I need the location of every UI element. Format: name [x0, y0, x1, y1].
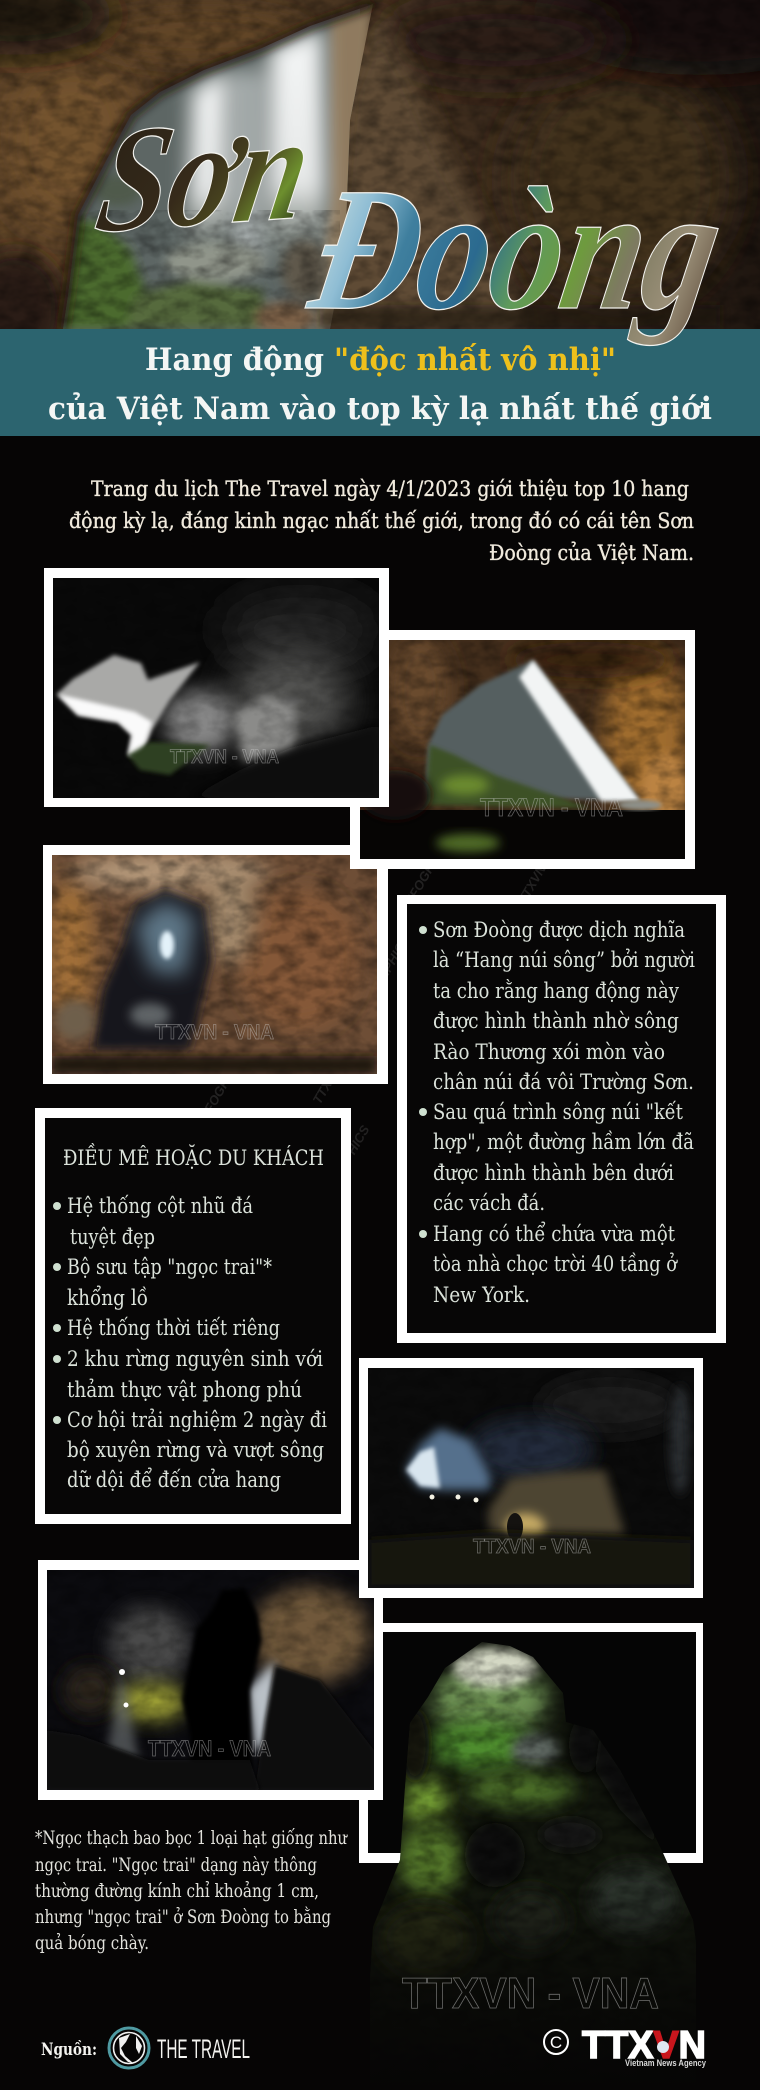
heading band — [0, 329, 760, 436]
photo frame 2: light beam into cave: TTXVN - VNA — [480, 794, 623, 822]
intro text: Trang du lịch The Travel ngày 4/1/2023 giới thiệu top 10 hang — [91, 477, 689, 501]
list item 1 — [53, 1194, 253, 1249]
background watermarks: TTXVN — [515, 862, 549, 906]
source name: THE TRAVEL — [157, 2034, 250, 2064]
background watermarks: INFOGRAPHICS — [350, 932, 413, 1026]
light beams — [186, 28, 328, 270]
list item 5: Cơ hội trải nghiệm 2 ngày đi — [67, 1408, 327, 1432]
list item 5: bộ xuyên rừng và vượt sông — [67, 1438, 324, 1462]
source label: Nguồn: — [41, 2040, 97, 2060]
list item 1: Hệ thống cột nhũ đá — [67, 1194, 253, 1218]
icon: globe in logo — [657, 2041, 669, 2053]
photo frame 1: foggy cave mouth: TTXVN - VNA — [170, 747, 279, 768]
list item 3: Hệ thống thời tiết riêng — [67, 1316, 280, 1340]
background watermarks: INFOGRAPHICS — [400, 817, 463, 912]
title: Sơn: Sơn — [86, 82, 323, 265]
bullet 2: Sau quá trình sông núi "kết — [433, 1100, 683, 1124]
hero photo: cave opening — [0, 0, 760, 329]
photo frame 6: green cave — [359, 1623, 703, 2009]
text box: what attracts visitors — [35, 1108, 351, 1524]
TTXVN wordmark: TTXVN — [582, 2024, 706, 2067]
footnote: thường đường kính chỉ khoảng 1 cm, — [35, 1881, 319, 1902]
bright opening — [57, 655, 200, 756]
green vegetation and fog — [60, 174, 329, 334]
bullet 1: là “Hang núi sông” bởi người — [433, 948, 695, 972]
photo frame 3: cave interior with tunnel — [43, 845, 388, 1084]
bullet 2 — [419, 1100, 694, 1215]
footnote: ngọc trai. "Ngọc trai" dạng này thông — [35, 1855, 317, 1876]
background watermarks — [160, 817, 549, 1252]
agency logo — [544, 2024, 707, 2069]
list item 2 — [53, 1255, 272, 1310]
bullet 1: ta cho rằng hang động này — [433, 979, 679, 1003]
intro text: Đoòng của Việt Nam. — [489, 541, 694, 565]
intro text: động kỳ lạ, đáng kinh ngạc nhất thế giới, trong đó có cái tên Sơn — [69, 509, 694, 533]
bullet 2: các vách đá. — [433, 1191, 545, 1215]
footnote — [35, 1828, 348, 1954]
copyright mark — [544, 2030, 568, 2054]
list item 1: tuyệt đẹp — [70, 1225, 155, 1249]
background watermarks: INFOGRAPHICS — [195, 1032, 258, 1126]
photo frame 5: pillar with green glow — [38, 1560, 383, 1800]
background watermarks: INFOGRAPHICS — [310, 1122, 373, 1216]
opening sky and cliff — [60, 0, 373, 334]
footnote: nhưng "ngọc trai" ở Sơn Đoòng to bằng — [35, 1906, 331, 1928]
footnote: *Ngọc thạch bao bọc 1 loại hạt giống như — [35, 1828, 348, 1849]
photo frame 4: explorers in dark cave — [359, 1358, 703, 1598]
bullet 2: được hình thành bên dưới — [433, 1161, 674, 1185]
photo frame 5: pillar with green glow: TTXVN - VNA — [148, 1736, 271, 1761]
bullet 1: Rào Thương xói mòn vào — [433, 1040, 665, 1064]
source credit — [41, 2028, 250, 2068]
intro text — [69, 477, 694, 565]
photo frame 1: foggy cave mouth — [44, 568, 389, 807]
list item 4: 2 khu rừng nguyên sinh với — [67, 1347, 323, 1371]
copyright mark: C — [550, 2033, 562, 2052]
list item 5 — [53, 1408, 327, 1492]
bullet 1: Sơn Đoòng được dịch nghĩa — [433, 918, 685, 942]
agency tagline: Vietnam News Agency — [625, 2058, 707, 2069]
bullet 3: tòa nhà chọc trời 40 tầng ở — [433, 1252, 678, 1276]
text box: meaning of the name — [397, 895, 726, 1343]
photo frame 4: explorers in dark cave: TTXVN - VNA — [473, 1536, 591, 1558]
background watermarks: TTXVN - VNA — [310, 1028, 363, 1106]
pillar — [182, 1588, 262, 1770]
heading line 2: của Việt Nam vào top kỳ lạ nhất thế giới — [48, 390, 712, 427]
icon: globe logo — [109, 2028, 149, 2068]
footnote: quả bóng chày. — [35, 1933, 149, 1954]
bullet 2: hợp", một đường hầm lớn đã — [433, 1130, 694, 1154]
bullet 3 — [419, 1222, 678, 1307]
photo frame 2: light beam into cave — [350, 630, 695, 869]
list item 2: Bộ sưu tập "ngọc trai"* — [67, 1255, 272, 1279]
bullet 3: Hang có thể chứa vừa một — [433, 1222, 675, 1246]
bullet 1: chân núi đá vôi Trường Sơn. — [433, 1070, 694, 1094]
heading line 1: Hang động "độc nhất vô nhị" — [145, 341, 616, 378]
background watermarks: TTXVN — [160, 1207, 194, 1252]
list item 5: dữ dội để đến cửa hang — [67, 1468, 281, 1492]
bullet 3: New York. — [433, 1283, 530, 1307]
photo frame 6: green cave: TTXVN - VNA — [402, 1969, 659, 2018]
list item 4 — [53, 1347, 323, 1402]
box heading: ĐIỀU MÊ HOẶC DU KHÁCH — [63, 1144, 324, 1170]
list item 4: thảm thực vật phong phú — [67, 1378, 302, 1402]
list item 2: khổng lồ — [67, 1286, 148, 1310]
bullet 1: được hình thành nhờ sông — [433, 1009, 679, 1033]
photo frame 3: cave interior with tunnel: TTXVN - VNA — [155, 1021, 274, 1044]
bullet 1 — [419, 918, 695, 1094]
tan rock column — [334, 14, 520, 329]
